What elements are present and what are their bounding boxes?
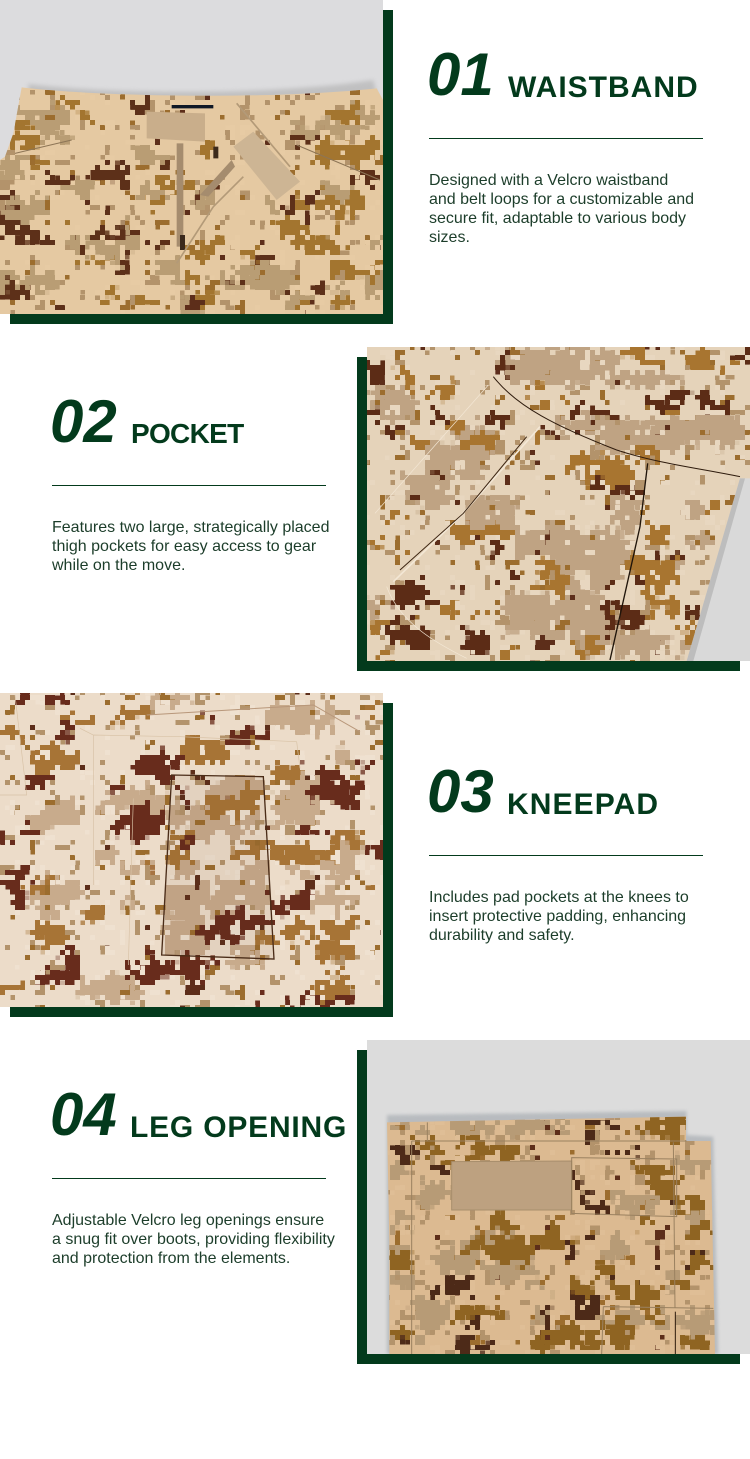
panel: pocket bbox=[50, 347, 750, 671]
description: leg opening bbox=[52, 1212, 335, 1267]
description: leg opening: a snug fit over boots, providing flexibility bbox=[52, 1231, 335, 1248]
description: pocket: while on the move. bbox=[52, 557, 185, 574]
description: waistband: Designed with a Velcro waistband bbox=[429, 172, 668, 189]
description: waistband bbox=[429, 172, 694, 246]
photo: leg opening bbox=[367, 1040, 750, 1354]
heading: 03 kneepad bbox=[427, 758, 659, 825]
photo frame: leg opening bbox=[357, 1050, 740, 1364]
photo frame: pocket bbox=[357, 357, 740, 671]
description: pocket: thigh pockets for easy access to gear bbox=[52, 538, 316, 555]
title kneepad: KNEEPAD bbox=[507, 788, 659, 821]
description: pocket bbox=[52, 519, 329, 574]
title leg opening: LEG OPENING bbox=[130, 1111, 347, 1144]
description: waistband: sizes. bbox=[429, 229, 470, 246]
title waistband: WAISTBAND bbox=[508, 71, 699, 104]
number 03: 03 bbox=[427, 758, 494, 825]
photo frame: kneepad bbox=[10, 703, 393, 1017]
number 01: 01 bbox=[427, 41, 494, 108]
description: kneepad: Includes pad pockets at the knees to bbox=[429, 889, 689, 906]
heading: 04 leg opening bbox=[50, 1081, 347, 1148]
description: kneepad bbox=[429, 889, 689, 944]
description: waistband: and belt loops for a customizable and bbox=[429, 191, 694, 208]
photo: kneepad bbox=[0, 693, 383, 1007]
description: kneepad: insert protective padding, enhancing bbox=[429, 908, 686, 925]
panel: kneepad bbox=[0, 693, 703, 1017]
heading: 01 waistband bbox=[427, 41, 699, 108]
description: leg opening: and protection from the elements. bbox=[52, 1250, 290, 1267]
photo: pocket bbox=[367, 347, 750, 661]
number 02: 02 bbox=[50, 388, 117, 455]
description: kneepad: durability and safety. bbox=[429, 927, 575, 944]
photo: waistband bbox=[0, 0, 383, 314]
description: pocket: Features two large, strategically placed bbox=[52, 519, 329, 536]
panel: leg opening bbox=[50, 1040, 750, 1364]
heading: 02 pocket bbox=[50, 388, 244, 455]
photo frame: waistband bbox=[10, 10, 393, 324]
description: leg opening: Adjustable Velcro leg openings ensure bbox=[52, 1212, 324, 1229]
description: waistband: secure fit, adaptable to various body bbox=[429, 210, 686, 227]
number 04: 04 bbox=[50, 1081, 117, 1148]
panel: waistband bbox=[0, 0, 703, 324]
title pocket: POCKET bbox=[131, 418, 243, 449]
